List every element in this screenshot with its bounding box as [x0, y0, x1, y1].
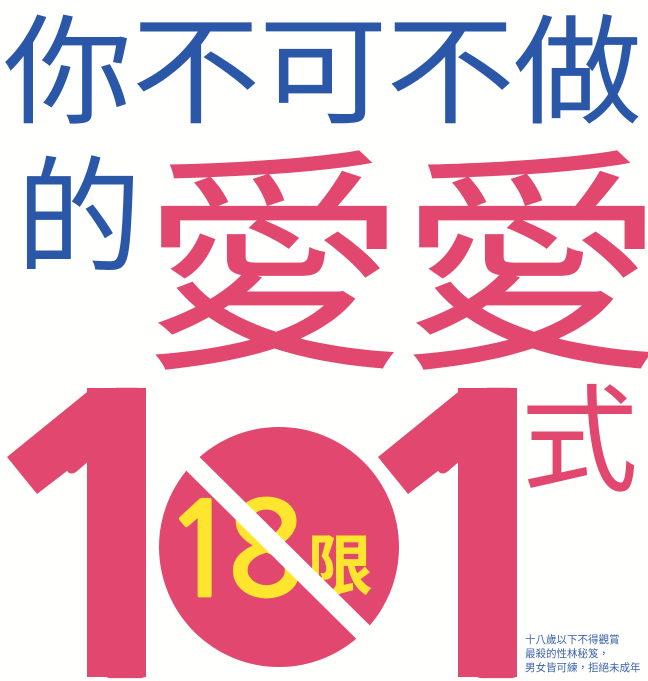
title: 式: 式 [521, 376, 638, 507]
18 label: 18 [162, 487, 305, 617]
small print note: 十八歲以下不得觀賞 [525, 633, 620, 646]
prohibition circle [159, 427, 399, 667]
small print note [525, 633, 640, 674]
限 label: 限 [307, 529, 373, 603]
title: 愛愛 [140, 135, 648, 401]
small print note: 男女皆可練，拒絕未成年 [525, 661, 640, 674]
title: 的: 的 [16, 148, 142, 289]
title: 愛愛: 愛 [140, 135, 408, 401]
white slash [186, 457, 370, 639]
small print note: 最殺的性林秘笈， [525, 647, 609, 660]
title line: 你不可不做: 你不可不做 [3, 8, 642, 140]
